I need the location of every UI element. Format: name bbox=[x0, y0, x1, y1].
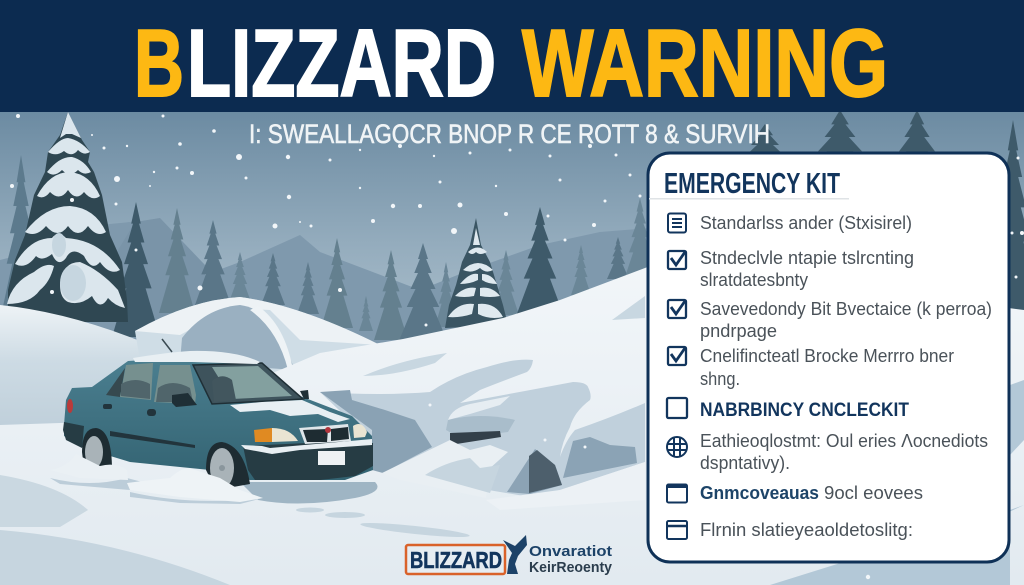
logo badge bbox=[406, 535, 613, 576]
licence plate bbox=[318, 451, 345, 465]
item 6: dspntativy). bbox=[700, 452, 790, 473]
grille bbox=[299, 424, 351, 444]
door handles and trim bbox=[103, 404, 195, 448]
item 7: Gnmcoveauas bbox=[700, 482, 819, 503]
hood snow bbox=[230, 400, 350, 422]
car bbox=[63, 339, 373, 490]
title banner: LIZZARD bbox=[187, 10, 496, 117]
item 6 bbox=[667, 430, 988, 473]
car body bbox=[64, 358, 373, 480]
far treeline bbox=[0, 155, 657, 343]
headlights bbox=[254, 424, 367, 442]
title text: B bbox=[134, 10, 184, 117]
item 2: Stndeclvle ntapie tslrcnting bbox=[700, 247, 914, 268]
logo badge: KeirReoenty bbox=[529, 559, 613, 576]
title banner bbox=[0, 0, 1024, 117]
roof snow bbox=[133, 351, 260, 364]
item 4: Cnelifincteatl Brocke Merrro bner bbox=[700, 345, 954, 366]
item 4 bbox=[668, 345, 954, 389]
sky background bbox=[0, 112, 1024, 352]
rear bumper bbox=[63, 422, 84, 448]
snow mound behind car bbox=[135, 297, 380, 430]
logo emblem bbox=[503, 535, 527, 574]
title banner: WARNING bbox=[522, 10, 888, 117]
car antenna bbox=[162, 339, 172, 352]
snow drift shading bbox=[320, 360, 645, 497]
snowflakes bbox=[10, 114, 1024, 579]
side mirror bbox=[172, 393, 197, 407]
large snow covered pine bbox=[7, 112, 128, 322]
foreground snow patches bbox=[0, 380, 1024, 585]
front bumper bbox=[243, 441, 373, 480]
item 3 bbox=[668, 298, 992, 341]
item 3: pndrpage bbox=[700, 320, 777, 341]
car windshield bbox=[193, 363, 303, 404]
tail light bbox=[67, 399, 73, 413]
item 8: Flrnin slatieyeaoldetoslitg: bbox=[700, 519, 913, 540]
car side windows bbox=[106, 363, 196, 404]
logo caption: Onvaratiot bbox=[529, 543, 612, 560]
item 3: Savevedondy Bit Bvectaice (k perroa) bbox=[700, 298, 992, 319]
item 2: slratdatesbnty bbox=[700, 269, 809, 290]
main snow field bbox=[0, 262, 1024, 585]
distant mountains bbox=[0, 218, 1024, 360]
foreground snow ledge bbox=[382, 440, 508, 498]
item 4: shng. bbox=[700, 368, 740, 389]
logo wordmark: BLIZZARD bbox=[410, 547, 502, 573]
panel: emergency kit bbox=[648, 153, 1009, 562]
snowy pine tree centre bbox=[445, 218, 508, 328]
item 5: checklist heading: NABRBINCY CNCLECKIT bbox=[700, 400, 909, 421]
car shadow bbox=[240, 482, 378, 504]
front wheel bbox=[206, 442, 250, 490]
bumper snow bbox=[241, 439, 372, 454]
item 1: Standarlss ander (Stxisirel) bbox=[700, 212, 912, 233]
rock under drift bbox=[320, 390, 432, 473]
subtitle: I: SWEALLAGOCR BNOP R CE ROTT 8 & SURVIH bbox=[249, 119, 770, 149]
item 2 bbox=[668, 247, 914, 290]
rear wheel bbox=[82, 428, 112, 470]
snow hill left bbox=[0, 305, 170, 430]
snow drifts by car bbox=[50, 454, 263, 504]
item 7 bbox=[667, 482, 923, 503]
item 7: 9ocl eovees bbox=[824, 482, 923, 503]
item 6: Eathieoqlostmt: Oul eries Λocnediots bbox=[700, 430, 988, 451]
panel heading: EMERGENCY KIT bbox=[664, 168, 840, 200]
dark trees bbox=[112, 110, 1024, 337]
